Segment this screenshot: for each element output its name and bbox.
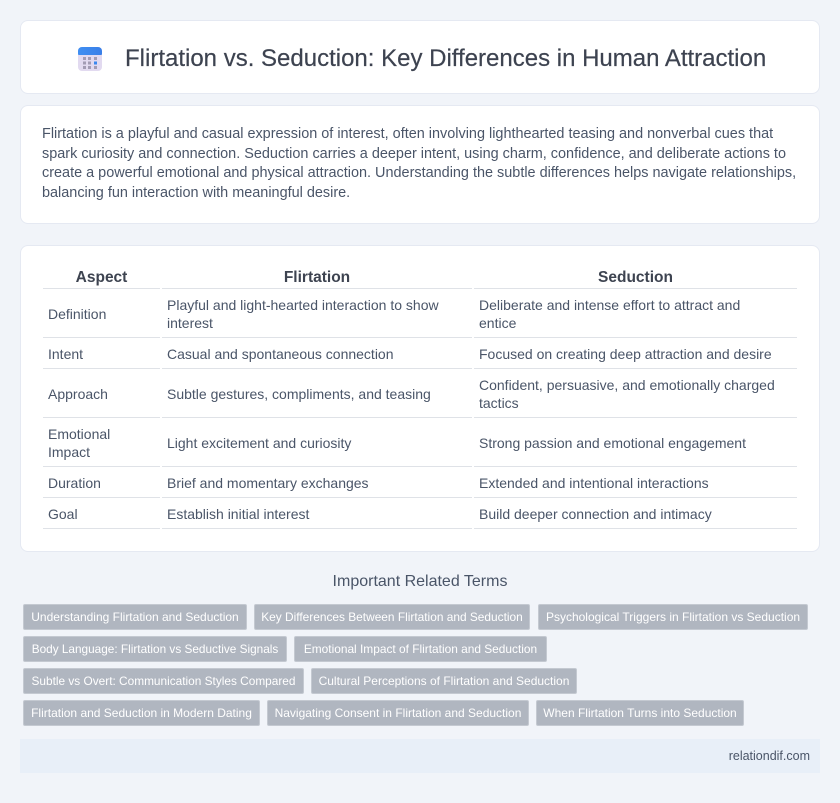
text: Intent bbox=[48, 346, 83, 362]
text: Emotional bbox=[48, 426, 110, 442]
related term tags: Subtle vs Overt: Communication Styles Compared bbox=[32, 674, 295, 688]
intro text: Flirtation is a playful and casual expression of interest, often involving lighthearted teasing and nonverbal cues that bbox=[42, 126, 773, 142]
text: tactics bbox=[479, 395, 519, 411]
text: Focused on creating deep attraction and desire bbox=[479, 346, 772, 362]
text: Goal bbox=[48, 506, 78, 522]
related term tags: Psychological Triggers in Flirtation vs Seduction bbox=[546, 610, 800, 624]
comparison table bbox=[76, 269, 673, 286]
intro text bbox=[42, 126, 796, 200]
footer text: relationdif.com bbox=[729, 749, 810, 763]
row: duration bbox=[48, 475, 709, 491]
text: Build deeper connection and intimacy bbox=[479, 506, 712, 522]
text: Brief and momentary exchanges bbox=[167, 475, 369, 491]
row: approach bbox=[48, 377, 775, 411]
row: definition bbox=[48, 297, 740, 331]
text: Confident, persuasive, and emotionally charged bbox=[479, 377, 775, 393]
text: Extended and intentional interactions bbox=[479, 475, 709, 491]
row: goal bbox=[48, 506, 712, 522]
comparison table: Aspect bbox=[76, 269, 127, 286]
text: Duration bbox=[48, 475, 101, 491]
related term tags: Flirtation and Seduction in Modern Dating bbox=[31, 706, 252, 720]
text: Deliberate and intense effort to attract and bbox=[479, 297, 740, 313]
intro text: balancing fun interaction with meaningful desire. bbox=[42, 184, 350, 200]
comparison table: Flirtation bbox=[284, 269, 350, 286]
intro text: create a powerful emotional and physical attraction. Understanding the subtle differences helps navigate relationships, bbox=[42, 165, 796, 181]
text: entice bbox=[479, 315, 516, 331]
related term tags bbox=[23, 604, 808, 726]
text: Definition bbox=[48, 306, 106, 322]
text: Impact bbox=[48, 444, 90, 460]
related term tags: Body Language: Flirtation vs Seductive Signals bbox=[32, 642, 278, 656]
related terms heading: Important Related Terms bbox=[333, 573, 507, 590]
text: Playful and light-hearted interaction to show bbox=[167, 297, 439, 313]
comparison table: Seduction bbox=[598, 269, 673, 286]
row: intent bbox=[48, 346, 772, 362]
icon: calendar grid bbox=[78, 47, 102, 71]
related term tags: Cultural Perceptions of Flirtation and Seduction bbox=[319, 674, 569, 688]
title: Flirtation vs. Seduction: Key Differences in Human Attraction bbox=[125, 45, 766, 72]
text: Light excitement and curiosity bbox=[167, 435, 351, 451]
text: Establish initial interest bbox=[167, 506, 309, 522]
panel: introduction bbox=[20, 105, 820, 224]
related term tags: When Flirtation Turns into Seduction bbox=[543, 706, 737, 720]
text: interest bbox=[167, 315, 213, 331]
panel: header bbox=[20, 20, 820, 94]
intro text: spark curiosity and connection. Seduction carries a deeper intent, using charm, confidence, and deliberate actions to bbox=[42, 146, 786, 162]
panel: comparison table bbox=[20, 245, 820, 552]
text: Strong passion and emotional engagement bbox=[479, 435, 746, 451]
related term tags: Understanding Flirtation and Seduction bbox=[31, 610, 239, 624]
text: Subtle gestures, compliments, and teasing bbox=[167, 386, 431, 402]
column headers bbox=[76, 269, 673, 286]
text: Casual and spontaneous connection bbox=[167, 346, 394, 362]
related term tags: Emotional Impact of Flirtation and Seduction bbox=[304, 642, 537, 656]
related term tags: Navigating Consent in Flirtation and Seduction bbox=[275, 706, 521, 720]
text: Approach bbox=[48, 386, 108, 402]
footer bar bbox=[20, 739, 820, 773]
related term tags: Key Differences Between Flirtation and Seduction bbox=[261, 610, 523, 624]
row: emotional impact bbox=[48, 426, 746, 460]
